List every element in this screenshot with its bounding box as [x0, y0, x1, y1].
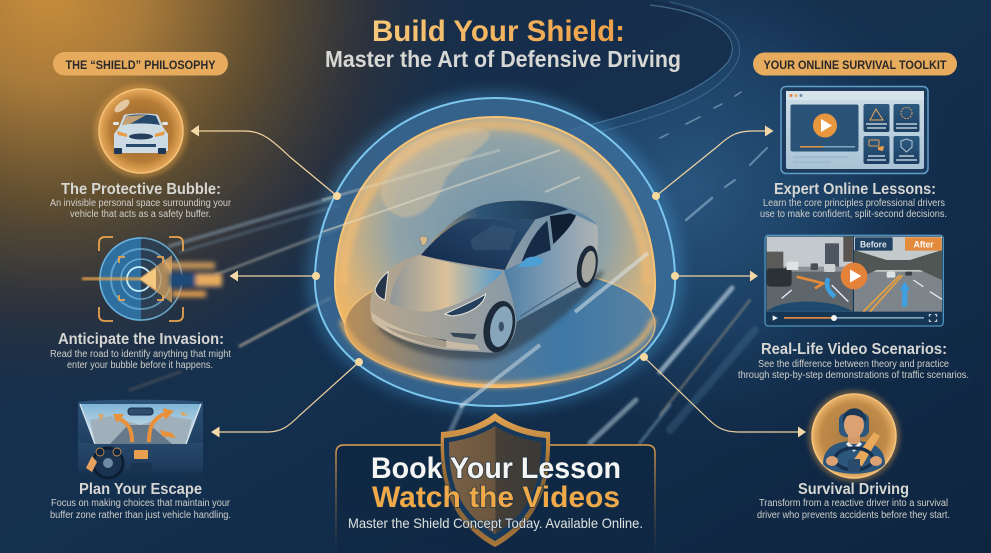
pill: the shield philosophy: THE “SHIELD” PHILOSOPHY: [66, 58, 216, 72]
heading and text: anticipate the invasion: [50, 331, 231, 371]
cta text: [348, 452, 643, 531]
connector: expert online lessons: [652, 126, 774, 200]
heading and text: plan your escape: buffer zone rather than just vehicle handling.: [50, 510, 231, 521]
central dome with car: [306, 90, 684, 412]
cta text: Master the Shield Concept Today. Available Online.: [348, 515, 643, 531]
floor ellipse: [322, 150, 655, 407]
heading and text: expert online lessons: Expert Online Lessons:: [774, 181, 936, 198]
heading and text: the protective bubble: [50, 181, 232, 220]
pill: the shield philosophy: [53, 52, 228, 76]
icon: real-life video player with before and after: [765, 235, 943, 326]
connector: anticipate the invasion: [230, 270, 320, 282]
heading and text: real-life video scenarios: [738, 341, 969, 381]
icon: real-life video player with before and after: After: [914, 239, 934, 249]
pill: your online survival toolkit: [753, 52, 957, 76]
cta text: Watch the Videos: [372, 481, 620, 514]
connector: protective bubble: [190, 125, 341, 200]
icon: online lesson browser window: [781, 86, 928, 174]
heading and text: the protective bubble: vehicle that acts as a safety buffer.: [70, 209, 211, 220]
heading and text: the protective bubble: An invisible personal space surrounding your: [50, 198, 232, 209]
heading and text: plan your escape: [50, 481, 231, 521]
heading and text: plan your escape: Plan Your Escape: [79, 481, 202, 498]
icon: radar anticipating an invasion: [82, 237, 222, 321]
heading and text: survival driving: driver who prevents accidents before they start.: [757, 510, 950, 521]
car: [370, 200, 604, 360]
icon: car in protective bubble: [94, 84, 188, 178]
heading and text: survival driving: [757, 481, 950, 521]
connector: survival driving: [640, 353, 806, 438]
heading and text: real-life video scenarios: Real-Life Video Scenarios:: [761, 341, 947, 358]
call to action panel: [336, 413, 655, 553]
heading and text: anticipate the invasion: Read the road to identify anything that might: [50, 349, 231, 360]
icon: dashboard view with escape arrows: [78, 400, 203, 478]
cta text: Book Your Lesson: [371, 452, 621, 485]
panel box: [336, 445, 655, 553]
heading and text: expert online lessons: [760, 181, 947, 220]
heading and text: survival driving: Transform from a reactive driver into a survival: [759, 498, 948, 509]
heading and text: anticipate the invasion: enter your bubble before it happens.: [67, 360, 213, 371]
heading and text: plan your escape: Focus on making choices that maintain your: [51, 498, 231, 509]
orange inner dome: [335, 117, 655, 387]
heading and text: expert online lessons: use to make confident, split-second decisions.: [760, 209, 947, 220]
heading and text: the protective bubble: The Protective Bubble:: [61, 181, 221, 198]
heading and text: real-life video scenarios: through step-by-step demonstrations of traffic scenarios.: [738, 370, 969, 381]
title: Build Your Shield:: [372, 15, 625, 48]
icon: shield: [441, 413, 550, 547]
connector: real-life video scenarios: [671, 270, 758, 282]
heading and text: expert online lessons: Learn the core principles professional drivers: [763, 198, 945, 209]
icon: survival driver in bubble: [808, 390, 900, 482]
icon: real-life video player with before and after: Before: [860, 239, 887, 249]
title: [325, 15, 681, 72]
connector: plan your escape: [211, 358, 363, 438]
title: Master the Art of Defensive Driving: [325, 46, 681, 72]
pill: your online survival toolkit: YOUR ONLINE SURVIVAL TOOLKIT: [764, 58, 947, 72]
outer blue bubble: [306, 90, 684, 412]
heading and text: anticipate the invasion: Anticipate the Invasion:: [58, 331, 224, 348]
heading and text: survival driving: Survival Driving: [798, 481, 909, 498]
heading and text: real-life video scenarios: See the difference between theory and practice: [758, 359, 949, 370]
